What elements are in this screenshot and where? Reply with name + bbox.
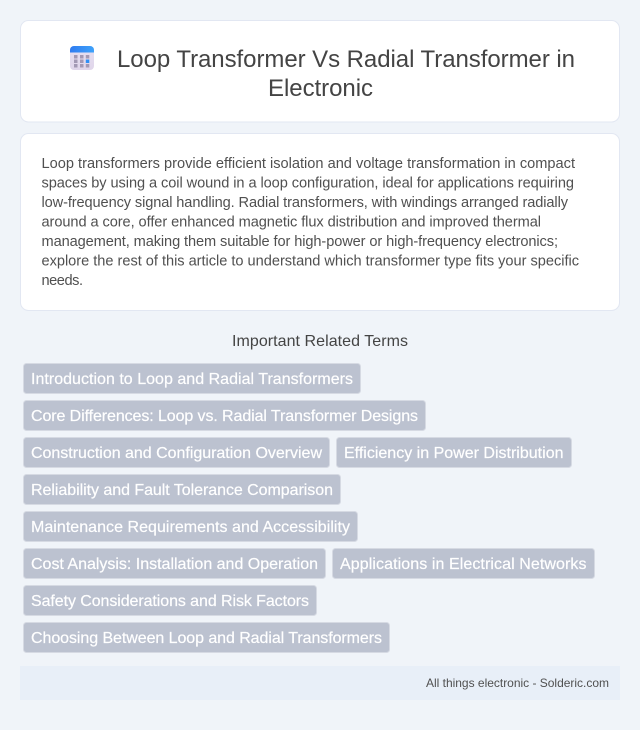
tag: introduction xyxy=(24,364,360,394)
tag: introduction: Introduction to Loop and Radial Transformers xyxy=(31,371,353,388)
footer: All things electronic - Solderic.com xyxy=(426,676,609,690)
tag: safety xyxy=(24,586,316,616)
tag: efficiency xyxy=(336,438,572,468)
tag: choosing xyxy=(24,622,390,652)
tag: applications xyxy=(332,548,594,578)
text block: introduction paragraph: explore the rest of this article to understand which transformer type fits your specific xyxy=(42,254,579,270)
tag: choosing: Choosing Between Loop and Radial Transformers xyxy=(31,630,382,647)
tag: construction xyxy=(24,438,330,468)
tag: maintenance: Maintenance Requirements and Accessibility xyxy=(31,519,350,536)
tag: core differences: Core Differences: Loop vs. Radial Transformer Designs xyxy=(31,408,418,425)
text block: introduction paragraph: low-frequency signal handling. Radial transformers, with windings arranged radially xyxy=(42,195,569,211)
heading: important related terms: Important Related Terms xyxy=(232,333,408,350)
tag: construction: Construction and Configuration Overview xyxy=(31,445,322,462)
title: Loop Transformer Vs Radial Transformer in xyxy=(117,46,575,73)
tag: efficiency: Efficiency in Power Distribution xyxy=(344,445,564,462)
panel: header xyxy=(20,20,620,122)
icon: calendar xyxy=(70,46,94,70)
text block: introduction paragraph: needs. xyxy=(42,273,83,289)
tag: applications: Applications in Electrical Networks xyxy=(340,556,586,573)
text block: introduction paragraph: around a core, offer enhanced magnetic flux distribution and improved thermal xyxy=(42,214,541,230)
footer xyxy=(20,666,620,700)
text block: introduction paragraph: management, making them suitable for high-power or high-frequency electronics; xyxy=(42,234,558,250)
tag: cost analysis: Cost Analysis: Installation and Operation xyxy=(31,556,318,573)
tag: core differences xyxy=(24,400,426,430)
tag: reliability: Reliability and Fault Tolerance Comparison xyxy=(31,482,333,499)
title: Electronic xyxy=(268,75,373,102)
tag: cost analysis xyxy=(24,548,326,578)
text block: introduction paragraph: Loop transformers provide efficient isolation and voltage transformation in compact xyxy=(42,156,575,172)
tag: safety: Safety Considerations and Risk Factors xyxy=(31,593,309,610)
tag: reliability xyxy=(24,474,340,504)
tag: maintenance xyxy=(24,512,358,542)
text block: introduction paragraph: spaces by using a coil wound in a loop configuration, ideal for applications requiring xyxy=(42,176,574,192)
title xyxy=(117,46,575,102)
text block: introduction paragraph xyxy=(42,156,579,289)
panel: introduction xyxy=(20,134,620,310)
tag list xyxy=(24,364,594,652)
